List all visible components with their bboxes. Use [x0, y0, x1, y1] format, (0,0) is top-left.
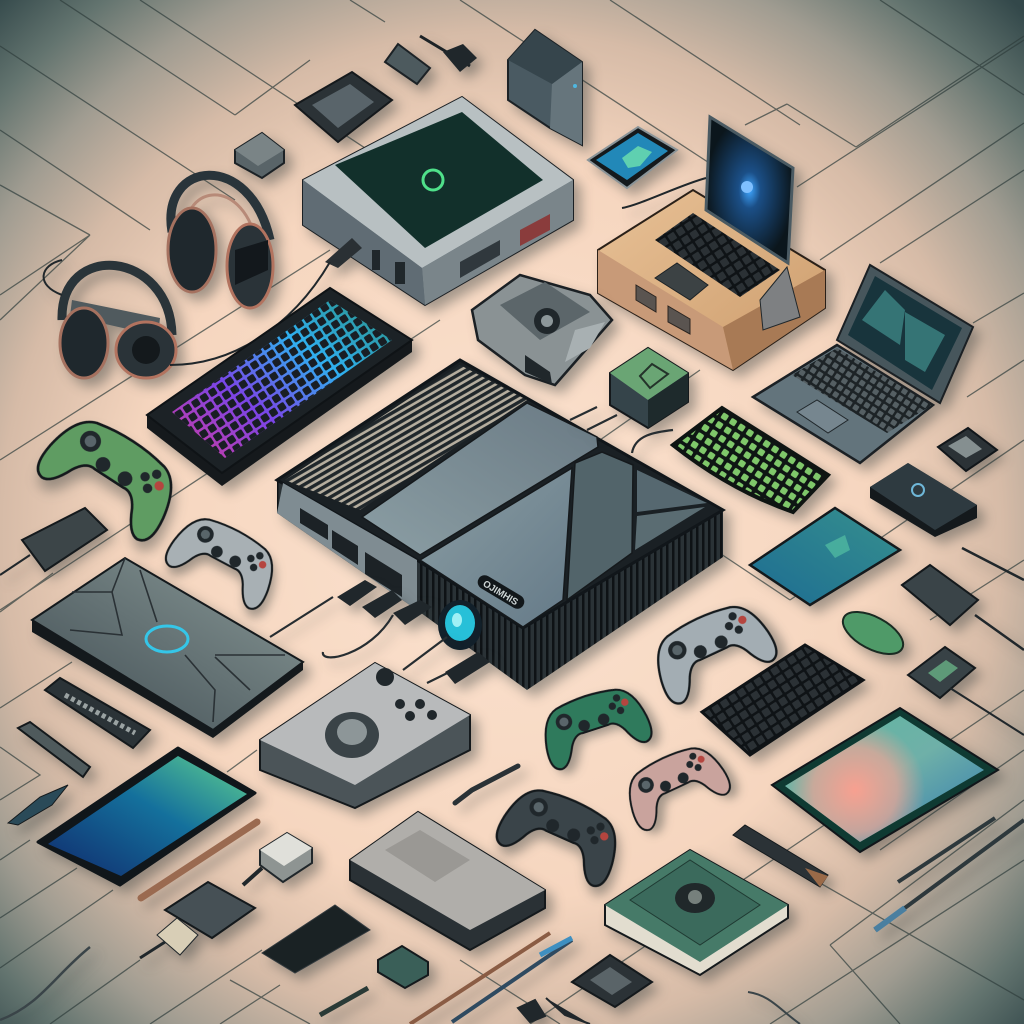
panel: top game console — [303, 97, 573, 305]
icon: green book console — [605, 850, 788, 975]
icon: pen left — [8, 785, 68, 825]
icon: charger block — [140, 882, 255, 958]
icon: pencils bottom center — [410, 933, 572, 1024]
icon: green mouse — [836, 603, 910, 663]
icon: smartphone with app logo — [588, 127, 677, 188]
icon: vertical router box — [508, 30, 582, 145]
icon: green gamepad center — [534, 680, 655, 772]
main console left side ports — [277, 483, 417, 610]
icon: circuit chip bottom — [572, 955, 652, 1007]
panel: main console — [277, 360, 723, 690]
icon: gradient tablet right — [772, 708, 998, 852]
icon: teal tablet — [750, 508, 900, 605]
icon: dark square hard drive — [870, 463, 977, 537]
icon: small module lower right — [908, 647, 1024, 735]
main console brand label — [475, 573, 527, 611]
icon: small stylus center — [455, 766, 518, 803]
icon: silver box — [350, 812, 545, 950]
icon: remote right — [733, 825, 828, 887]
icon: green ergonomic keyboard — [673, 408, 828, 512]
icon: white power adapter — [243, 833, 312, 885]
icon: cable box left — [0, 508, 107, 575]
icon: RGB keyboard — [147, 288, 412, 486]
icon: wired adapter top — [420, 36, 477, 72]
icon: small usb dongle — [385, 44, 430, 84]
icon: small gray gamepad — [162, 506, 286, 612]
icon: cable bottom left — [0, 947, 90, 1020]
icon: gray robot gadget — [472, 275, 612, 385]
icon: green cube — [610, 348, 688, 428]
icon: small battery block — [235, 133, 284, 178]
icon: headphones large — [168, 175, 273, 308]
icon: small stylus remote — [18, 722, 90, 777]
icon: pens right — [875, 818, 1024, 930]
icon: small dark module right — [938, 428, 997, 471]
icon: green gamepad — [32, 404, 190, 545]
icon: black keyboard — [702, 645, 863, 755]
icon: small device with wire — [902, 548, 1024, 650]
icon: gray right gamepad — [643, 593, 781, 707]
icon: black gamepad — [493, 777, 630, 890]
main console vent — [285, 365, 527, 510]
icon: white gaming console — [260, 663, 470, 808]
icon: stylus bottom — [320, 988, 368, 1015]
icon: headphones small — [44, 260, 330, 378]
icon: phone bottom — [262, 905, 370, 973]
icon: circuit board module — [295, 72, 392, 142]
main console brand label: OJIMHIS — [481, 579, 520, 608]
main console top panels — [362, 403, 598, 555]
icon: wooden pencil — [141, 822, 257, 898]
icon: green small cube bottom — [378, 946, 428, 988]
icon: gaming laptop — [753, 265, 973, 463]
panel: laptop on wooden crate — [598, 117, 825, 370]
icon: dark slim tablet with ring — [32, 558, 303, 738]
icon: cable bottom right — [748, 992, 800, 1024]
main console blue lens — [438, 600, 482, 650]
icon: small plugs bottom — [518, 998, 590, 1024]
icon: gradient tablet left — [38, 748, 255, 885]
icon: pink gamepad — [617, 737, 734, 833]
cables from main console — [270, 407, 673, 684]
icon: remote control — [45, 678, 150, 748]
